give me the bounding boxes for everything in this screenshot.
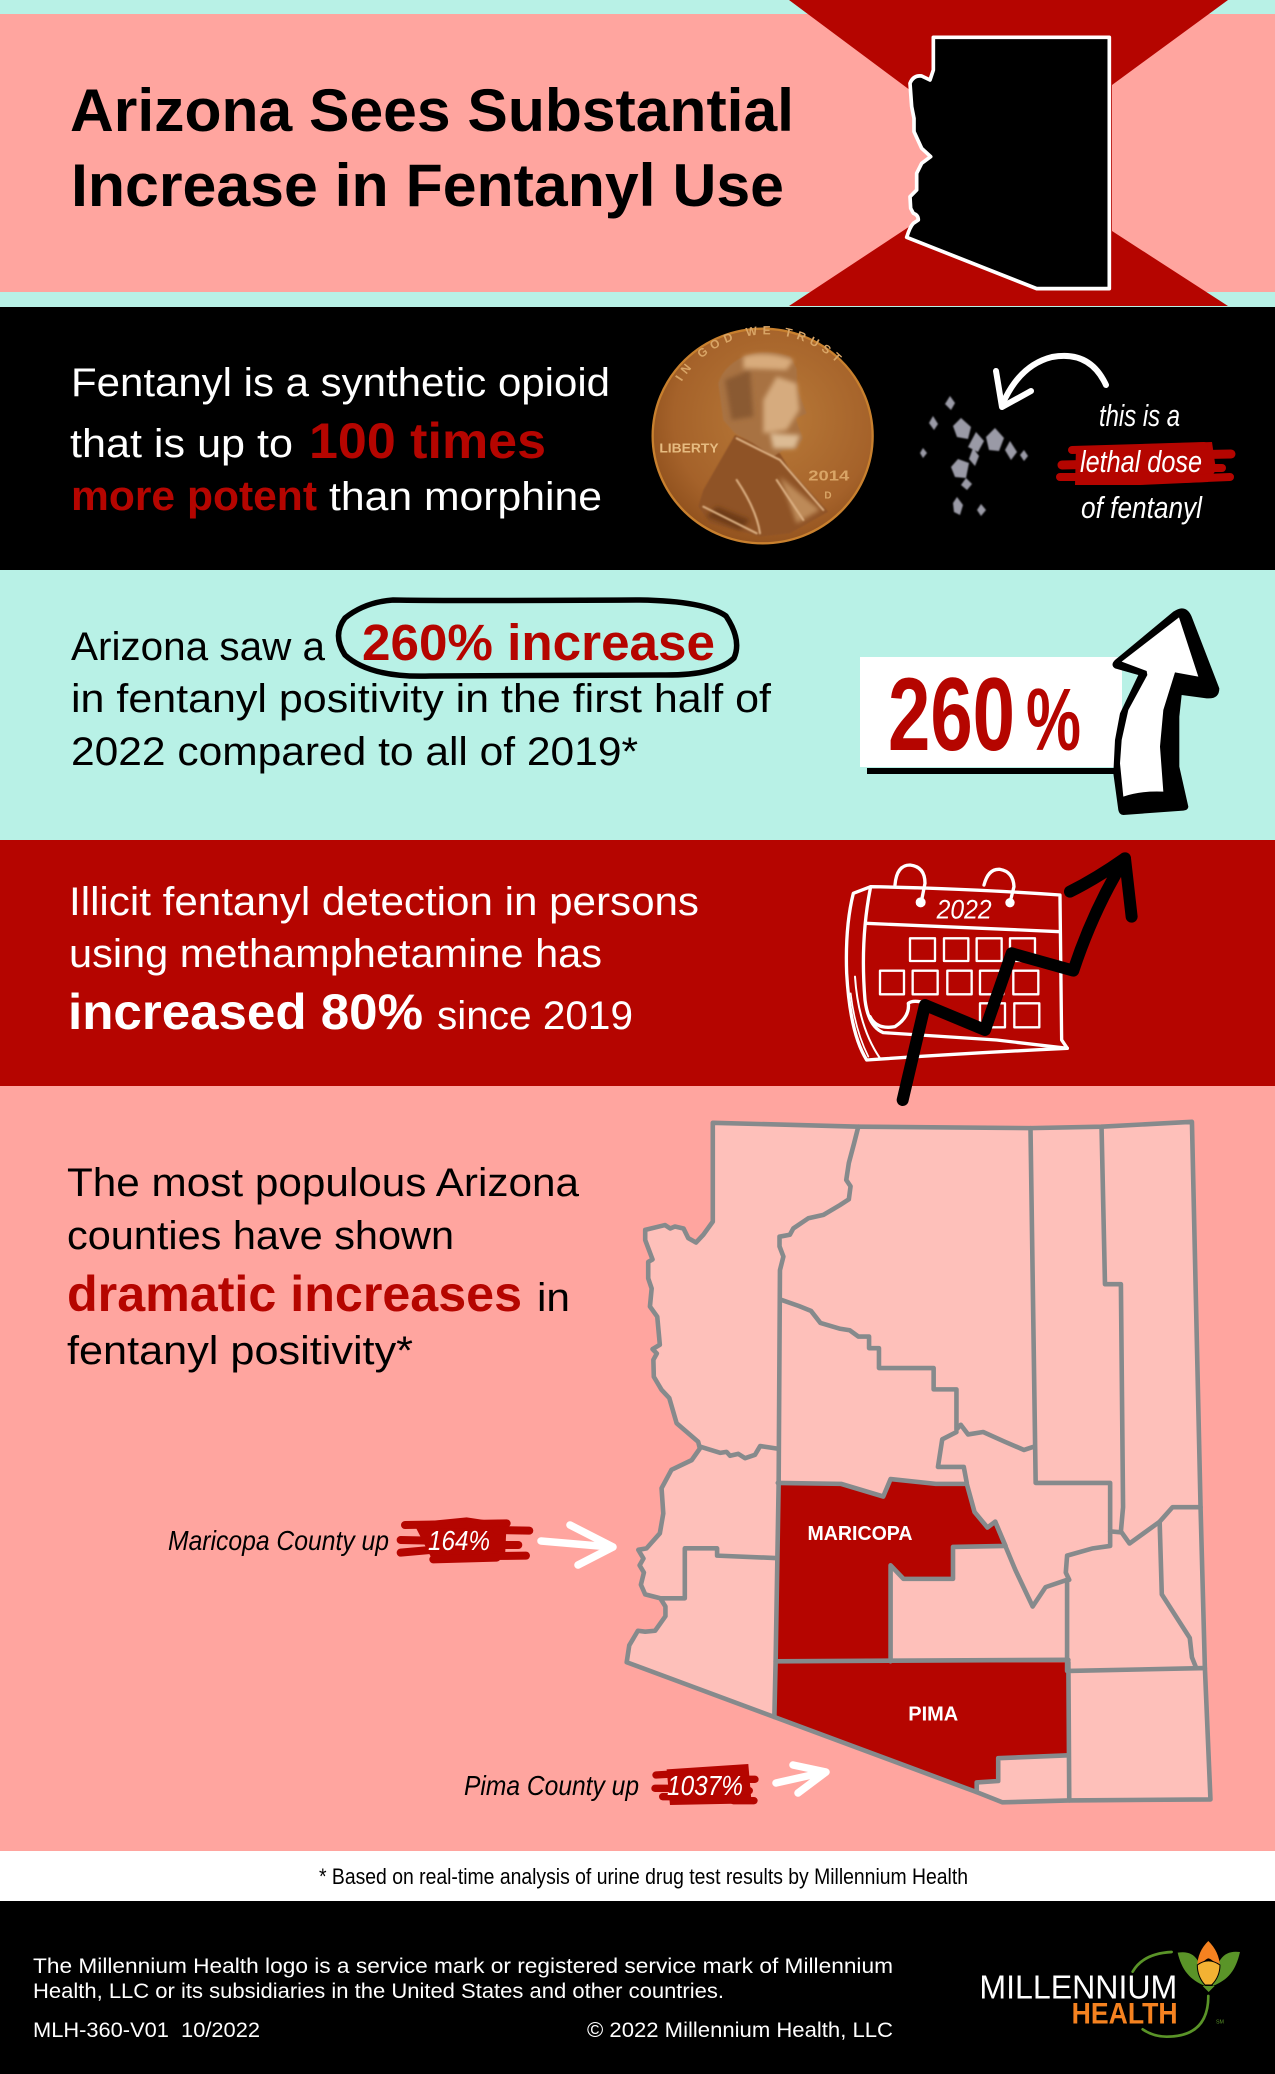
title: Increase in Fentanyl Use (71, 152, 784, 219)
callout: Pima County up 1037%: Pima County up (464, 1770, 639, 1801)
county: Maricopa: MARICOPA (808, 1523, 913, 1545)
text: detection statistic: Illicit fentanyl detection in persons (69, 880, 699, 924)
callout: lethal dose: lethal dose (1080, 444, 1202, 479)
text: potency statement: 100 times (309, 413, 546, 469)
logo: Millennium Health: HEALTH (1072, 1997, 1178, 2030)
arrow (541, 1525, 613, 1565)
text: counties statement: The most populous Arizona (67, 1161, 580, 1205)
text: legal notice: Health, LLC or its subsidiaries in the United States and other countries. (33, 1980, 724, 2003)
text: potency statement: Fentanyl is a synthetic opioid (71, 361, 610, 405)
logo: Millennium Health: SM (1216, 2020, 1224, 2026)
icon: Arizona silhouette (907, 37, 1109, 289)
text: legal notice: © 2022 Millennium Health, LLC (587, 2019, 893, 2042)
callout: Maricopa County up 164%: Maricopa County up (168, 1525, 389, 1556)
icon: penny: D (824, 490, 832, 501)
icon: penny: LIBERTY (659, 442, 719, 456)
callout: 260% box: % (1026, 670, 1081, 769)
icon: calendar with rising arrow (846, 858, 1132, 1100)
text: potency statement: that is up to (70, 422, 293, 466)
arrow: curved pointer to fentanyl (996, 356, 1106, 407)
county: Maricopa (776, 1479, 1006, 1661)
text: Arizona statistic (71, 625, 772, 774)
callout: Maricopa County up 164% (168, 1517, 613, 1565)
icon: fentanyl specks (920, 396, 1028, 516)
icon: calendar with rising arrow: 2022 (936, 894, 992, 924)
map: Arizona counties (627, 1122, 1210, 1802)
text: potency statement: more potent (71, 472, 317, 519)
text: potency statement (70, 361, 610, 519)
text: legal notice (33, 1955, 893, 2042)
county: Pima: PIMA (908, 1703, 958, 1725)
icon: penny: IN GOD WE TRUST (675, 326, 842, 381)
icon: penny: 2014 (808, 469, 850, 485)
panel: footnote (0, 1851, 1275, 1901)
text: counties statement: fentanyl positivity* (67, 1329, 413, 1373)
text: counties statement: in (537, 1276, 570, 1320)
callout: lethal dose (1060, 398, 1231, 525)
text: detection statistic: using methamphetamine has (69, 932, 602, 976)
callout: circled 260% increase: 260% increase (362, 614, 715, 671)
callout: 260% box: 260 (888, 657, 1015, 773)
callout: Pima County up 1037% (464, 1764, 826, 1805)
callout: circled 260% increase (338, 600, 737, 676)
county boundary lines (627, 1122, 1210, 1802)
callout: lethal dose: of fentanyl (1081, 490, 1203, 525)
text: detection statistic: increased 80% (68, 984, 423, 1040)
logo: Millennium Health (979, 1941, 1240, 2037)
text: legal notice: The Millennium Health logo is a service mark or registered service mark of Millennium (33, 1955, 893, 1978)
arrow (776, 1765, 826, 1793)
brush highlight (401, 1517, 529, 1562)
callout: lethal dose: this is a (1099, 398, 1180, 433)
callout: Pima County up 1037%: 1037% (667, 1770, 743, 1801)
panel: footer (0, 1901, 1275, 2074)
text: counties statement (67, 1161, 580, 1373)
text: Arizona statistic: in fentanyl positivity in the first half of (71, 677, 772, 721)
panel: footnote: * Based on real-time analysis of urine drug test results by Millennium Health (319, 1864, 968, 1889)
panel: 260% increase (0, 570, 1275, 840)
penny: portrait highlights (707, 354, 820, 530)
callout: Maricopa County up 164%: 164% (428, 1525, 490, 1556)
callout: 260% box (860, 657, 1122, 774)
text: counties statement: dramatic increases (67, 1266, 522, 1322)
county: Pima (774, 1662, 1068, 1792)
penny: bust shading (698, 352, 828, 537)
panel: populous counties (0, 1086, 1275, 1851)
text: potency statement: than morphine (329, 475, 602, 519)
panel: synthetic opioid (70, 326, 1236, 544)
panel: methamphetamine detection (0, 840, 1275, 1086)
title: Arizona Sees Substantial (70, 77, 794, 144)
text: detection statistic (68, 880, 699, 1040)
text: legal notice: MLH-360-V01 10/2022 (33, 2019, 260, 2042)
panel: header (0, 0, 1275, 307)
title (70, 77, 794, 219)
icon: up arrow (1112, 608, 1219, 815)
text: detection statistic: since 2019 (437, 994, 633, 1038)
red bowtie background (789, 0, 1228, 306)
text: counties statement: counties have shown (67, 1214, 454, 1258)
logo: Millennium Health: MILLENNIUM (979, 1969, 1177, 2006)
text: Arizona statistic: Arizona saw a (71, 625, 326, 669)
icon: penny (652, 326, 874, 544)
brush highlight (655, 1764, 755, 1805)
text: Arizona statistic: 2022 compared to all of 2019* (71, 730, 638, 774)
